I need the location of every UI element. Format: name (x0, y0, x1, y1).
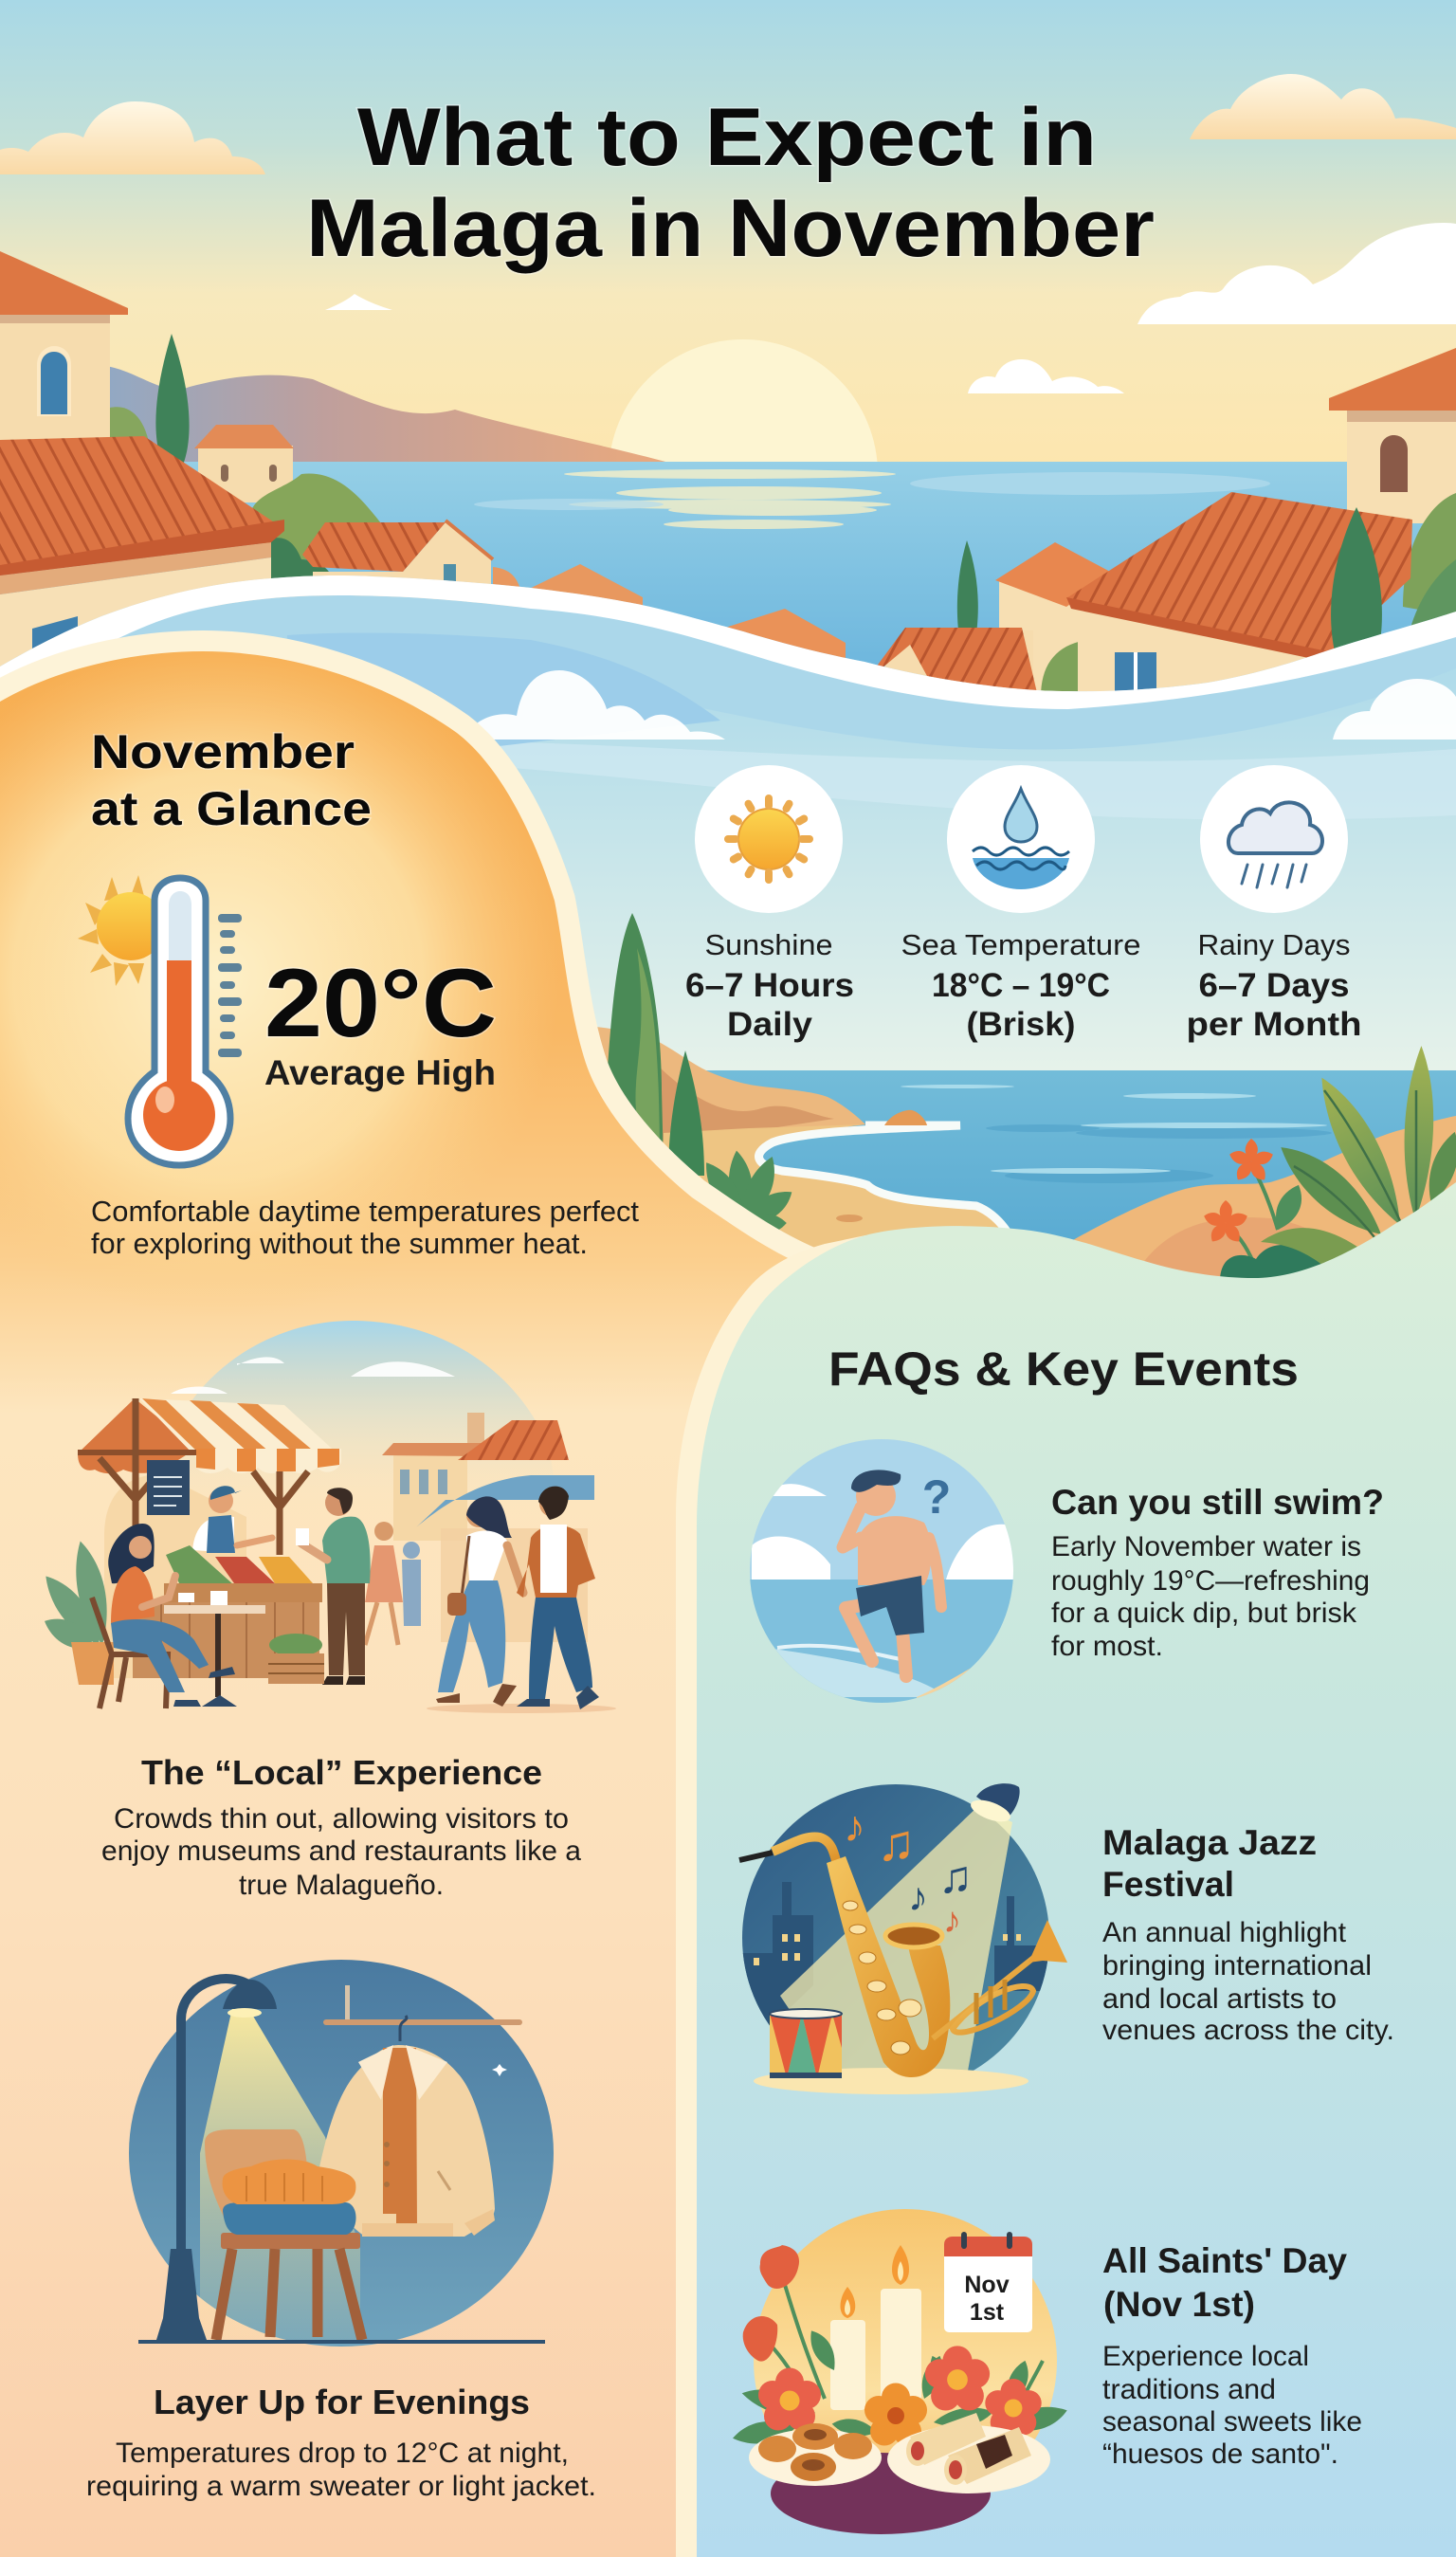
clouds below wave (464, 670, 1456, 740)
right plate of huesos de santo (887, 2413, 1050, 2493)
panel: coast scene (0, 607, 1456, 1327)
small house (194, 425, 294, 502)
sea (0, 462, 1424, 688)
cloud right white (1138, 223, 1456, 324)
spotlight head (976, 1783, 1020, 1818)
heading: jazz festival: Malaga Jazz (1102, 1823, 1317, 1862)
heading: jazz festival (1102, 1823, 1317, 1904)
music notes: ♪ (943, 1901, 961, 1941)
small cloud (968, 359, 1124, 393)
stat: rainy days (1187, 928, 1361, 1043)
stat: average high temperature: Average High (264, 1053, 496, 1092)
text: swim description: Early November water is (1051, 1531, 1361, 1562)
left large roof (0, 436, 284, 683)
icon: thermometer with sun (78, 875, 242, 1165)
illustration: jazz instruments (739, 1783, 1067, 2094)
text: jazz description: and local artists to (1102, 1983, 1337, 2015)
title (306, 92, 1155, 274)
text: local experience (101, 1803, 581, 1901)
text: layer up (86, 2438, 596, 2502)
text: glance description: for exploring without the summer heat. (91, 1227, 588, 1260)
counter with produce (133, 1545, 322, 1678)
ground (754, 2068, 1028, 2094)
text: swim description: for most. (1051, 1631, 1163, 1662)
heading: layer up: Layer Up for Evenings (154, 2383, 530, 2421)
text: jazz description: venues across the city. (1102, 2015, 1394, 2046)
text: layer up: requiring a warm sweater or light jacket. (86, 2471, 596, 2502)
text: All Saints description: Experience local (1102, 2341, 1309, 2372)
wave band (0, 575, 1456, 749)
heading: November at a Glance (91, 725, 372, 835)
panel: header harbour scene (0, 0, 1456, 708)
stat: average high temperature: 20°C (264, 949, 497, 1057)
distant cypress (957, 540, 978, 628)
swimmer figure (843, 1470, 941, 1676)
back wall (104, 1474, 246, 1678)
title: Malaga in November (306, 183, 1155, 274)
stat: rainy days: 6–7 Days (1198, 967, 1350, 1004)
stat: sea temperature: 18°C – 19°C (932, 967, 1110, 1004)
star (492, 2064, 507, 2076)
man with coffee (296, 1488, 371, 1685)
text: local experience: enjoy museums and restaurants like a (101, 1836, 581, 1867)
folded sweaters (223, 2160, 356, 2235)
walking couple (427, 1487, 616, 1713)
left cypress (155, 334, 190, 471)
text: All Saints description: “huesos de santo". (1102, 2438, 1338, 2470)
menu board (147, 1460, 190, 1515)
stat: rainy days: per Month (1187, 1006, 1361, 1043)
left plate of pastries (749, 2423, 882, 2486)
icon: rainy days (1200, 765, 1348, 913)
right hill (1073, 1116, 1456, 1327)
illustration: evening layers (129, 1960, 554, 2347)
stat: sunshine: 6–7 Hours (685, 967, 854, 1004)
cloud top left (0, 101, 265, 174)
trumpet (933, 1955, 1037, 2038)
illustration: swimmer (749, 1436, 1019, 1712)
text: swim description: for a quick dip, but brisk (1051, 1598, 1357, 1629)
cloud top right (1190, 74, 1456, 139)
text: jazz description: bringing international (1102, 1950, 1372, 1982)
right tower (1329, 348, 1456, 523)
buildings (382, 1413, 569, 1541)
beach (664, 1124, 1012, 1327)
text: jazz description: An annual highlight (1102, 1917, 1347, 1948)
icon: sea temperature (947, 765, 1095, 913)
stat: sunshine: Sunshine (705, 928, 832, 961)
title: What to Expect in (357, 92, 1097, 183)
drum (770, 2009, 842, 2078)
background people (365, 1522, 421, 1645)
heading: November at a Glance: November (91, 725, 355, 778)
heading: All Saints' Day: All Saints' Day (1102, 2241, 1347, 2280)
stat: rainy days: Rainy Days (1198, 928, 1350, 961)
jacket on hanger (318, 2016, 495, 2237)
skyline (739, 1882, 1047, 2038)
chair (205, 2129, 362, 2340)
illustration: All Saints candles and sweets (731, 2209, 1070, 2534)
spotlight beam (780, 1806, 1012, 2076)
stat: sea temperature (901, 928, 1141, 1043)
calendar: 1st (970, 2299, 1005, 2326)
text: All Saints description (1102, 2341, 1362, 2470)
music notes: ♫ (877, 1815, 916, 1872)
green bush (248, 474, 391, 559)
stat: sunshine: Daily (727, 1006, 813, 1043)
middle roof house (878, 628, 1037, 690)
calendar (944, 2232, 1032, 2332)
music notes: ♪ (908, 1874, 928, 1919)
ground line (138, 2340, 545, 2344)
house with roof (302, 521, 493, 593)
calendar: Nov (964, 2272, 1010, 2298)
small orange roofs (493, 564, 643, 605)
vendor (192, 1486, 272, 1553)
music notes: ♪ (844, 1801, 865, 1851)
stat: sea temperature: Sea Temperature (901, 928, 1141, 961)
crate of greens (268, 1634, 324, 1684)
text: glance description: Comfortable daytime temperatures perfect (91, 1195, 639, 1228)
saxophone (739, 1836, 950, 2077)
sea ripples (901, 1085, 1332, 1183)
text: local experience: true Malagueño. (239, 1870, 444, 1901)
text: local experience: Crowds thin out, allowing visitors to (114, 1803, 569, 1835)
blue awning (416, 1475, 594, 1527)
cypress trees (607, 913, 704, 1176)
right large roof (1066, 492, 1412, 706)
cloth (771, 2453, 991, 2534)
heading: can you still swim: Can you still swim? (1051, 1483, 1384, 1522)
stat: sea temperature: (Brisk) (967, 1006, 1075, 1043)
text: jazz description (1102, 1917, 1394, 2046)
panel: orange glance background (0, 651, 815, 2557)
light cone (200, 2008, 360, 2340)
seated woman at table (92, 1524, 265, 1708)
stat: sunshine (685, 928, 854, 1043)
heading: local experience: The “Local” Experience (141, 1753, 542, 1792)
text: swim description (1051, 1531, 1370, 1662)
street lamp (156, 1979, 277, 2340)
palm shrub (697, 1149, 798, 1233)
right cypress (1331, 507, 1382, 659)
music notes: ♫ (938, 1853, 973, 1903)
heading: FAQs and key events: FAQs & Key Events (828, 1342, 1299, 1396)
panel: green FAQ background (676, 1182, 1456, 2557)
stall awning (78, 1398, 341, 1555)
text: layer up: Temperatures drop to 12°C at night, (116, 2438, 569, 2469)
text: All Saints description: seasonal sweets like (1102, 2406, 1362, 2438)
icon: question mark: ? (922, 1470, 951, 1524)
mountain (95, 365, 669, 463)
right small house (995, 542, 1114, 694)
plants right (1202, 1046, 1456, 1282)
text: glance description (91, 1195, 639, 1260)
heading: jazz festival: Festival (1102, 1865, 1234, 1904)
heading: November at a Glance: at a Glance (91, 782, 372, 835)
flower garland (731, 2245, 1070, 2449)
left tower (0, 251, 128, 455)
heading: All Saints' Day: (Nov 1st) (1103, 2285, 1255, 2324)
music notes (844, 1801, 973, 1941)
rail (323, 1985, 522, 2025)
icon: sunshine (695, 765, 843, 913)
text: All Saints description: traditions and (1102, 2374, 1276, 2405)
candles (830, 2245, 921, 2410)
heading: All Saints' Day (1102, 2241, 1347, 2324)
sand cliff (588, 1019, 865, 1185)
text: swim description: roughly 19°C—refreshing (1051, 1565, 1370, 1597)
sun (610, 339, 878, 462)
illustration: local market scene (36, 1321, 616, 1713)
plant and pot (36, 1538, 116, 1685)
